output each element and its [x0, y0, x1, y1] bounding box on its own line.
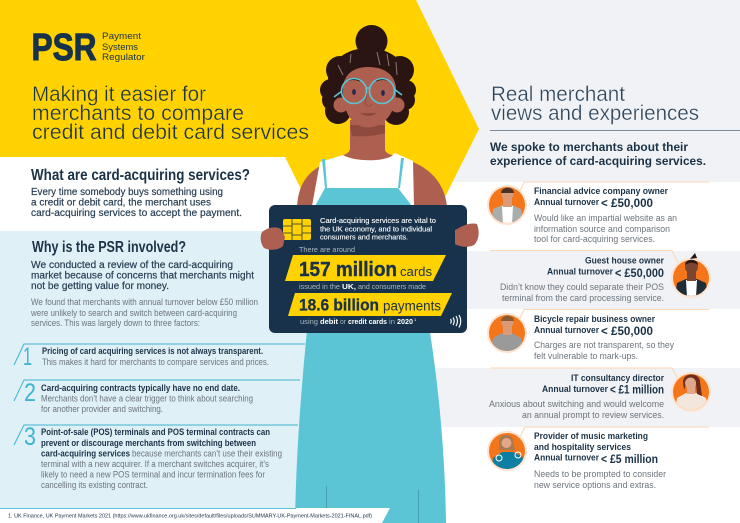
text: card intro: consumers and merchants.	[320, 232, 408, 242]
logo: PSR Payment Systems Regulator: Systems	[102, 42, 138, 53]
dress skirt	[295, 320, 446, 523]
text block: we spoke to merchants	[490, 140, 706, 168]
dress bib and straps	[315, 158, 412, 206]
merchant 1: financial advice: tool for card-acquiring services.	[534, 234, 655, 244]
text block: card-acquiring explanation: Every time somebody buys something using	[31, 187, 223, 198]
logo: PSR Payment Systems Regulator: Regulator	[102, 52, 145, 63]
text: using debit or credit cards: in	[389, 317, 395, 326]
merchant 5: music marketing: and hospitality services	[534, 442, 631, 452]
merchant 4: IT consultancy	[489, 368, 711, 420]
ears	[334, 98, 348, 112]
factor 1: Pricing of card acquiring services is not always transparent.	[42, 346, 263, 356]
text: using debit or credit cards: using	[300, 317, 318, 326]
text: card intro: Card-acquiring services are vital to	[320, 216, 436, 225]
text: using debit or credit cards: debit	[320, 317, 339, 326]
logo: PSR Payment Systems Regulator	[32, 27, 145, 69]
avatar	[487, 313, 527, 353]
merchant 5: music marketing: new service options and extras.	[534, 480, 656, 490]
merchant 3: bicycle repair: Annual turnover	[534, 325, 600, 335]
merchant 3: bicycle repair: Charges are not transparent, so they	[534, 340, 675, 350]
neck shadow	[350, 125, 385, 136]
background: right grey panel	[416, 0, 740, 182]
text block: we spoke to merchants: experience of card-acquiring services.	[490, 154, 706, 168]
heading: real merchant views: Real merchant	[491, 82, 625, 106]
text block: card-acquiring explanation: a credit or debit card, the merchant uses	[31, 198, 211, 208]
icon: right hand	[455, 223, 479, 247]
text: using debit or credit cards	[300, 317, 417, 326]
logo: PSR Payment Systems Regulator: Payment	[102, 31, 141, 42]
hair strands	[338, 52, 397, 75]
text: using debit or credit cards: or	[340, 317, 346, 326]
stat: 18.6 billion payments: 18.6 billion	[299, 296, 379, 314]
factor 3: because merchants can’t use their existing	[132, 448, 282, 458]
text: using debit or credit cards: 1	[414, 317, 417, 322]
factor 3: card-acquiring services	[41, 448, 130, 458]
factor 2: Merchants don’t have a clear trigger to think about searching	[41, 394, 253, 404]
merchant 3: bicycle repair	[487, 310, 709, 361]
text block: findings: were unlikely to search and switch between card-acquiring	[30, 308, 237, 318]
merchant 4: IT consultancy: Annual turnover	[542, 384, 609, 394]
title: Making it easier for	[32, 82, 206, 106]
text: using debit or credit cards: 2020	[397, 317, 413, 326]
background: yellow header shape	[0, 0, 479, 230]
eyebrows	[346, 80, 390, 81]
merchant 2: guest house: Didn’t know they could separate their POS	[500, 282, 664, 292]
merchant 4: IT consultancy: Anxious about switching and would welcome	[489, 399, 664, 409]
text: issued in the UK: and consumers made	[358, 282, 426, 291]
text: issued in the UK	[299, 282, 426, 291]
factor 3: terminal with a new acquirer. If a merchant switches acquirer, it’s	[41, 459, 270, 469]
title: merchants to compare	[32, 101, 244, 125]
factor 3: likely to need a new POS terminal and incur termination fees for	[41, 470, 265, 480]
text block: card-acquiring explanation: card-acquiring services to accept the payment.	[31, 208, 242, 219]
text block: review summary: not be getting value for money.	[31, 281, 169, 292]
merchant 1: financial advice: information source and comparison	[534, 224, 670, 234]
text: issued in the UK: issued in the	[299, 282, 340, 291]
factor 3: cancelling its existing contract.	[41, 480, 148, 490]
arms and shoulders	[297, 162, 447, 240]
panel: what are card-acquiring services background	[0, 157, 303, 231]
merchant 4: IT consultancy: < £1 million	[610, 384, 664, 396]
title	[32, 82, 309, 144]
merchant 2: guest house: Guest house owner	[585, 256, 665, 266]
text: there are around: There are around	[299, 245, 355, 254]
text: card intro	[320, 216, 436, 242]
text block: review summary: market because of concerns that merchants might	[31, 270, 254, 282]
text: card intro: the UK economy, and to individual	[320, 224, 432, 234]
hair	[320, 25, 416, 125]
nose and mouth	[365, 94, 372, 106]
glasses	[334, 78, 402, 104]
text block: findings	[30, 297, 258, 328]
panel: merchant row bands	[425, 251, 740, 427]
white top	[312, 153, 414, 206]
factor 1: This makes it hard for merchants to compare services and prices.	[42, 357, 269, 367]
text block: review summary	[31, 260, 254, 292]
stat: 18.6 billion payments	[288, 293, 452, 316]
merchant 1: financial advice: Financial advice company owner	[534, 186, 669, 196]
factor 3: prevent or discourage merchants from switching between	[41, 438, 256, 448]
merchant 4: IT consultancy: IT consultancy director	[571, 373, 665, 383]
icon: left hand	[261, 227, 285, 250]
heading: real merchant views	[491, 82, 699, 125]
avatar	[487, 431, 527, 471]
factor 2: 2	[24, 379, 36, 407]
merchant 1: financial advice: < £50,000	[601, 198, 653, 210]
text: issued in the UK: UK,	[342, 282, 356, 291]
merchant 3: bicycle repair: < £50,000	[601, 326, 653, 338]
merchant 2: guest house: Annual turnover	[547, 266, 614, 276]
stat: 157 million cards	[285, 255, 446, 281]
heading: why is the PSR involved: Why is the PSR involved?	[32, 239, 186, 256]
text block: findings: services. This was largely down to three factors:	[31, 318, 200, 328]
factor 1: 1	[23, 343, 32, 371]
factor 3: Point-of-sale (POS) terminals and POS terminal contracts can	[41, 427, 270, 437]
footnote: 1. UK Finance, UK Payment Markets 2021 (https://www.ukfinance.org.uk/sites/default/files/uploads/SUMMARY-UK-Payment-Markets-2021-FINAL.pdf)	[8, 514, 372, 520]
skirt folds	[326, 486, 418, 523]
merchant 5: music marketing: Provider of music marketing	[534, 431, 648, 441]
icon: contactless	[450, 315, 461, 328]
factor 3: 3	[24, 423, 36, 451]
avatar	[671, 253, 711, 298]
merchant 5: music marketing: Needs to be prompted to consider	[534, 469, 666, 479]
title: credit and debit card services	[32, 120, 309, 144]
merchant 5: music marketing	[487, 427, 709, 490]
card panel	[269, 205, 467, 333]
eyes	[352, 89, 356, 95]
stat: 157 million cards: cards	[400, 264, 432, 279]
avatar	[671, 372, 711, 412]
neck	[343, 120, 393, 160]
avatar	[487, 185, 527, 225]
merchant 5: music marketing: Annual turnover	[534, 452, 600, 462]
text: using debit or credit cards: credit cards	[348, 317, 387, 326]
merchant 1: financial advice: Annual turnover	[534, 197, 600, 207]
factor 2: Card-acquiring contracts typically have no end date.	[41, 383, 240, 393]
factor 3	[14, 423, 298, 490]
heading: what are card-acquiring services: What are card-acquiring services?	[31, 167, 250, 184]
heading: real merchant views: views and experiences	[491, 101, 699, 125]
merchant 3: bicycle repair: Bicycle repair business owner	[534, 314, 656, 324]
text block: we spoke to merchants: We spoke to merchants about their	[490, 140, 688, 154]
factor 2: for another provider and switching.	[41, 404, 163, 414]
merchant 4: IT consultancy: an annual prompt to review services.	[522, 410, 664, 420]
text block: findings: We found that merchants with annual turnover below £50 million	[31, 297, 258, 307]
text block: card-acquiring explanation	[31, 187, 242, 219]
merchant 3: bicycle repair: felt vulnerable to mark-ups.	[534, 351, 638, 361]
text block: review summary: We conducted a review of the card-acquiring	[31, 260, 233, 271]
merchant 1: financial advice	[487, 182, 709, 244]
face	[343, 67, 396, 128]
factor 1	[14, 343, 305, 371]
merchant 5: music marketing: < £5 million	[601, 454, 658, 466]
logo: PSR Payment Systems Regulator: PSR	[32, 27, 96, 69]
footer strip	[0, 508, 390, 523]
merchant 2: guest house: < £50,000	[615, 268, 664, 280]
factor 2	[14, 379, 300, 414]
panel: why is the PSR involved background	[0, 231, 310, 508]
merchant 2: guest house	[490, 250, 711, 303]
merchant 1: financial advice: Would like an impartial website as an	[534, 213, 677, 223]
illustration: woman holding card	[295, 25, 447, 523]
merchant 2: guest house: terminal from the card processing service.	[502, 293, 664, 303]
stat: 157 million cards: 157 million	[299, 258, 397, 281]
stat: 18.6 billion payments: payments	[383, 298, 441, 314]
icon: card chip	[283, 219, 311, 240]
